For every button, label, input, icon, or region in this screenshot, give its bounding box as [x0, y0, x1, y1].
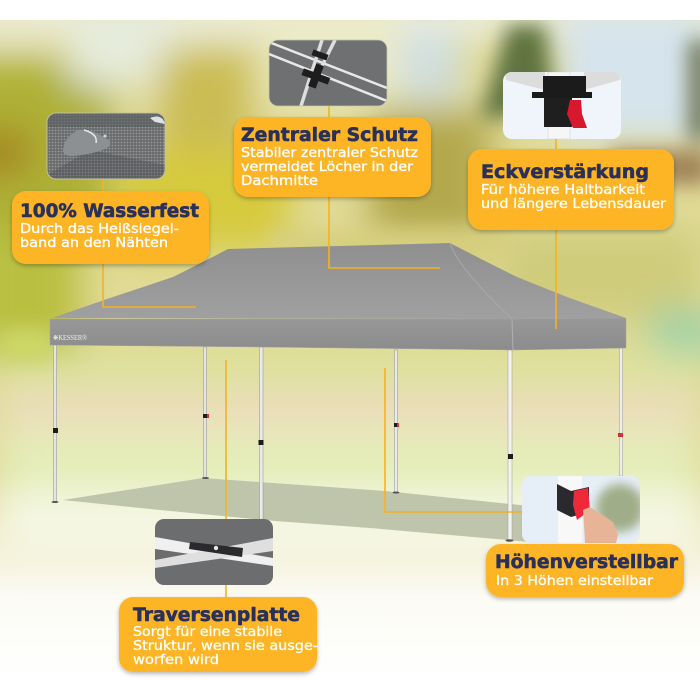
description: Durch das Heißsiegel-: [20, 221, 179, 237]
description: [481, 182, 666, 212]
description: [133, 624, 318, 668]
tent ground shadow: [63, 478, 530, 542]
tent roof: [52, 243, 626, 319]
description: Dachmitte: [241, 173, 318, 189]
photo: central hub: [269, 40, 387, 106]
tent poles: [52, 345, 623, 542]
callout: Zentraler Schutz: [234, 40, 431, 197]
callout: Eckverstärkung: [468, 72, 674, 230]
description: worfen wird: [133, 652, 219, 668]
heading: Traversenplatte: [133, 604, 300, 626]
description: [20, 221, 179, 251]
connector lines: [103, 106, 556, 597]
heading: 100% Wasserfest: [20, 200, 199, 222]
orange label: [486, 544, 684, 597]
callout: Höhenverstellbar: [486, 476, 684, 597]
description: band an den Nähten: [20, 235, 168, 251]
photo: height adjust latch: [522, 476, 644, 543]
callout: 100% Wasserfest: [12, 113, 209, 264]
description: [241, 145, 418, 189]
description: und längere Lebensdauer: [481, 196, 666, 212]
photo: truss plate: [155, 519, 273, 585]
orange label: [234, 117, 431, 197]
heading: Höhenverstellbar: [495, 551, 679, 573]
description: Struktur, wenn sie ausge-: [133, 638, 318, 654]
description: Für höhere Haltbarkeit: [481, 182, 645, 198]
heading: Eckverstärkung: [481, 161, 649, 183]
brand logo: ❋KESSER®: [53, 334, 88, 342]
orange label: [468, 149, 674, 230]
photo: water drop on fabric: [47, 113, 165, 179]
photo: corner bracket: [503, 72, 621, 139]
description: vermeidet Löcher in der: [241, 159, 413, 175]
orange label: [119, 597, 317, 672]
description: Sorgt für eine stabile: [133, 624, 282, 640]
tent valance: [50, 318, 626, 350]
tent: [50, 243, 626, 542]
description: Stabiler zentraler Schutz: [241, 145, 418, 161]
description: In 3 Höhen einstellbar: [496, 573, 653, 589]
callout: Traversenplatte: [119, 519, 318, 672]
heading: Zentraler Schutz: [241, 124, 418, 146]
orange label: [12, 191, 209, 264]
